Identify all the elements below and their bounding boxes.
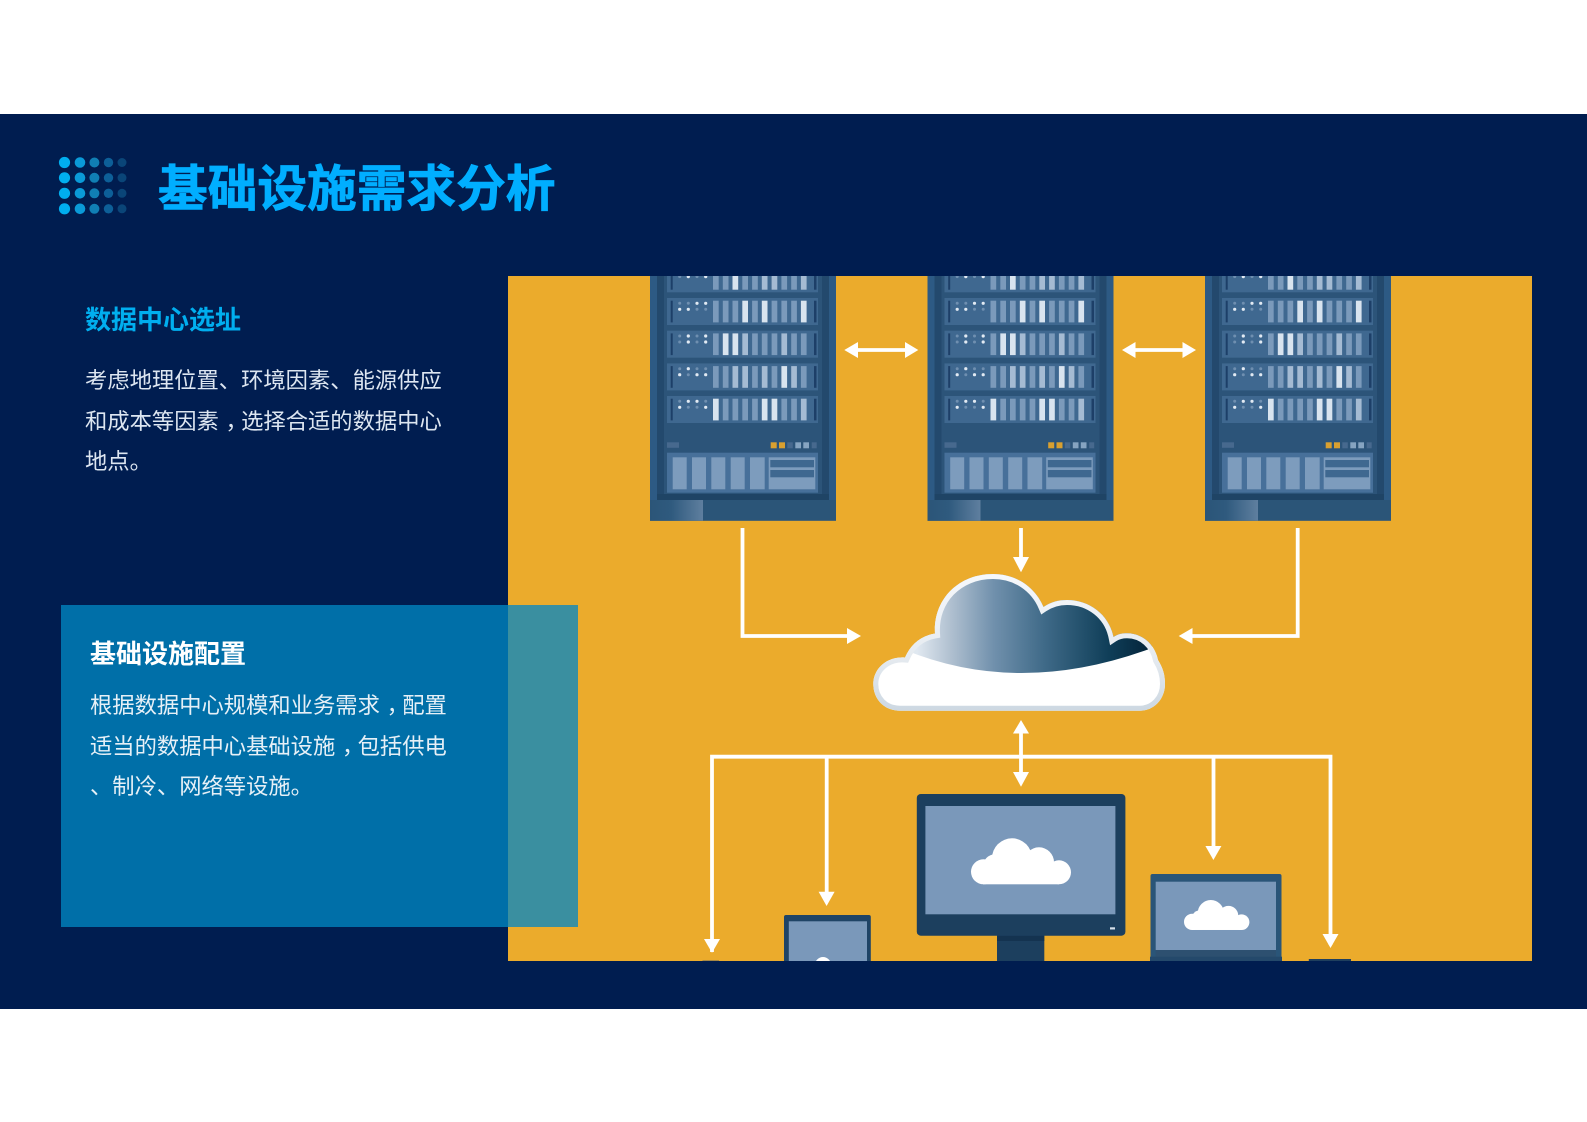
arrow: right rack to cloud xyxy=(1179,528,1298,644)
icon: dot grid xyxy=(58,156,126,214)
server rack center xyxy=(928,260,1114,521)
illustration panel: cloud network xyxy=(508,276,1532,961)
orange panel background xyxy=(508,276,1532,961)
device: laptop xyxy=(1150,874,1282,963)
device: desktop monitor xyxy=(917,794,1125,962)
device: tablet xyxy=(784,915,871,961)
server rack left xyxy=(650,260,836,521)
text block: data center siting xyxy=(85,368,442,474)
arrow: center rack to cloud xyxy=(1013,528,1029,572)
text block: infrastructure configuration: 、制冷、网络等设施。 xyxy=(90,774,313,799)
device: phone right xyxy=(1308,959,1351,961)
text block: data center siting: 考虑地理位置、环境因素、能源供应 xyxy=(85,368,442,393)
translucent overlap on illustration xyxy=(508,605,578,927)
panel: infrastructure configuration xyxy=(60,605,578,927)
text block: data center siting: 和成本等因素 ，选择合适的数据中心 xyxy=(85,408,442,434)
arrow: rack center to right xyxy=(1122,342,1196,358)
arrow: cloud to device bus xyxy=(1013,720,1029,787)
device: phone left xyxy=(702,960,719,961)
server rack right xyxy=(1205,260,1391,521)
text block: infrastructure configuration xyxy=(90,693,447,799)
central cloud xyxy=(873,574,1165,711)
distribution lines and device arrows xyxy=(704,757,1338,953)
arrow: rack left to center xyxy=(844,342,918,358)
illustration contents clipped to the panel xyxy=(650,260,1391,973)
text block: data center siting: 地点。 xyxy=(85,449,152,474)
heading: data center siting: 数据中心选址 xyxy=(85,305,241,335)
heading: infrastructure configuration: 基础设施配置 xyxy=(90,639,246,669)
navy background band xyxy=(0,114,1587,1009)
text block: infrastructure configuration: 根据数据中心规模和业务需求 ，配置 xyxy=(90,693,447,718)
text block: infrastructure configuration: 适当的数据中心基础设施 ，包括供电 xyxy=(90,734,447,758)
title: 基础设施需求分析 xyxy=(158,161,556,217)
arrow: left rack to cloud xyxy=(742,528,861,644)
